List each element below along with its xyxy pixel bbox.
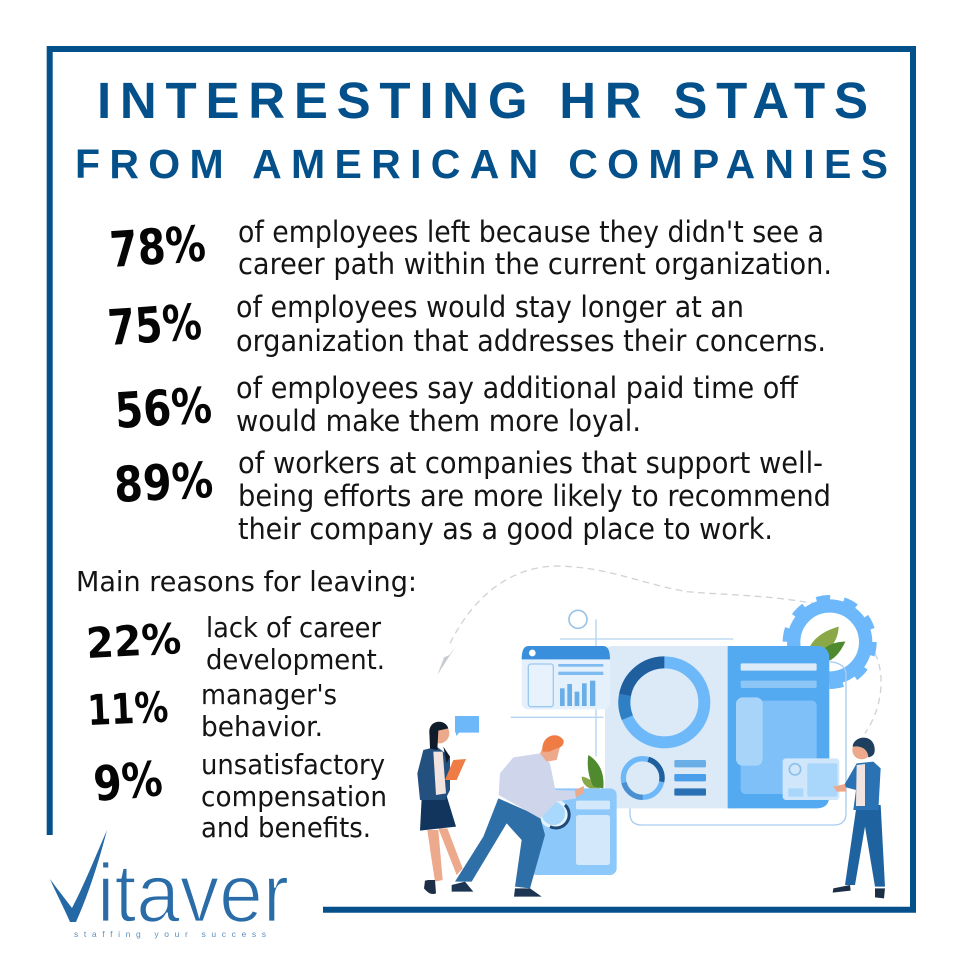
stat: 78%: 78% [108, 215, 208, 279]
stat: 75%: of employees would stay longer at an [236, 290, 744, 324]
reason: 22%: lack of career [206, 611, 381, 644]
reason: 11% [86, 678, 337, 743]
woman with card [783, 738, 885, 898]
small donut chart [623, 759, 662, 797]
speech bubble [455, 716, 479, 736]
stat: 56%: of employees say additional paid time off [236, 371, 799, 405]
reason: 22%: development. [206, 643, 385, 676]
stat: 75%: 75% [106, 294, 204, 357]
stat: 56% [113, 371, 799, 440]
stat: 89%: 89% [113, 452, 214, 514]
stat: 78%: of employees left because they didn't see a [238, 215, 824, 249]
reason: 11%: behavior. [201, 710, 323, 743]
stat: 75% [106, 290, 826, 358]
reason: 11%: manager's [201, 678, 337, 711]
stat: 89%: of workers at companies that support well- [238, 446, 823, 480]
dashed flight path [450, 566, 881, 733]
illustration: team working on dashboard [417, 566, 885, 898]
legend bars [674, 760, 706, 796]
stat: 78% [108, 215, 832, 281]
reason: 22% [85, 611, 385, 676]
logo tagline: staffing your success [74, 929, 266, 939]
icon: logo check mark [50, 830, 107, 922]
title: FROM AMERICAN COMPANIES [75, 141, 888, 187]
man pushing [452, 735, 584, 897]
reason: 9%: unsatisfactory [201, 748, 385, 781]
stat: 89%: being efforts are more likely to recommend [238, 479, 831, 513]
reason: 9% [91, 748, 387, 844]
reason: 22%: 22% [85, 614, 182, 668]
box with leaves [530, 755, 617, 875]
title: INTERESTING HR STATS [97, 72, 868, 129]
logo wordmark: itaver [97, 846, 289, 940]
stat: 56%: 56% [113, 377, 214, 440]
subheading: main reasons for leaving: Main reasons for leaving: [76, 565, 417, 598]
dashboard right panel [728, 646, 829, 808]
woman with tablet [417, 722, 466, 894]
reason: 9%: 9% [91, 751, 165, 813]
reason: 9%: and benefits. [201, 811, 371, 844]
stat: 78%: career path within the current organization. [238, 247, 832, 281]
reason: 11%: 11% [86, 683, 169, 735]
stat: 89% [113, 446, 831, 546]
stat: 75%: organization that addresses their concerns. [236, 324, 826, 358]
gear with leaves [786, 598, 874, 686]
icon: paper plane [437, 646, 456, 675]
large donut chart [624, 662, 704, 742]
guide lines [511, 610, 733, 757]
logo: Vitaver [50, 830, 289, 940]
stat: 56%: would make them more loyal. [236, 404, 641, 438]
tray outline [630, 662, 846, 825]
title [75, 72, 888, 187]
dashboard center panel [605, 646, 733, 808]
stat: 89%: their company as a good place to work. [238, 512, 773, 546]
small bar chart card [522, 646, 610, 709]
reason: 9%: compensation [201, 780, 387, 813]
